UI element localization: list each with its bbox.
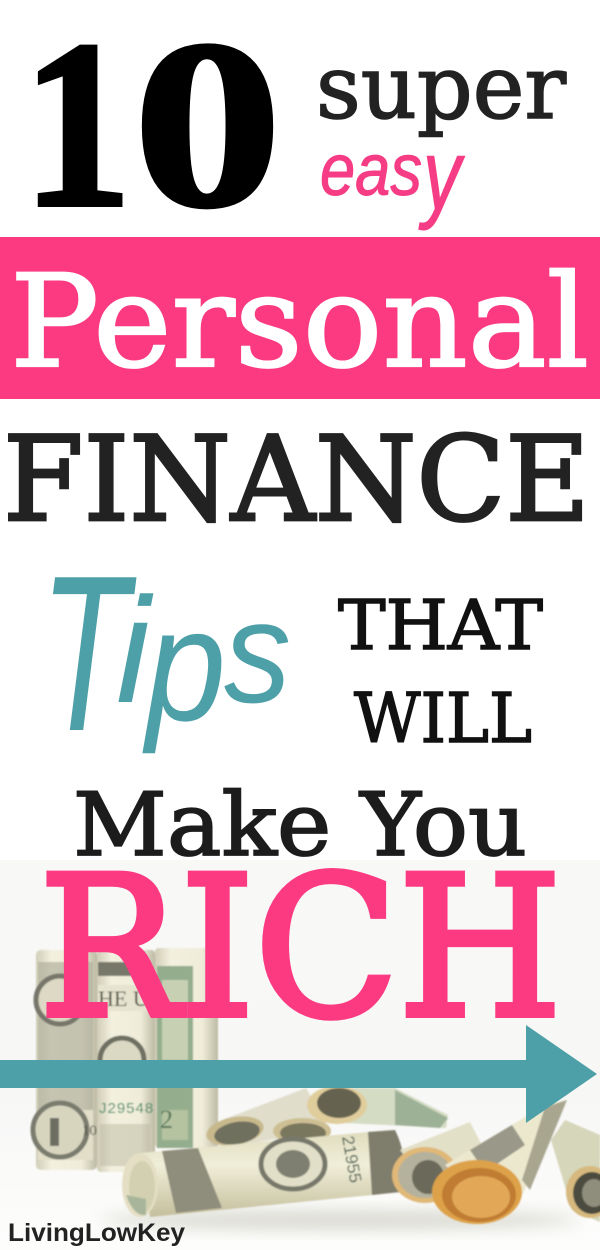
heading: Tips — [40, 530, 291, 778]
heading: Tips: T — [40, 530, 137, 778]
heading: WILL: WILL — [354, 680, 532, 759]
upright roll 2: J29548 — [99, 1100, 154, 1117]
heading: Tips: p — [142, 575, 226, 754]
heading: easy: eas — [320, 130, 422, 211]
heading: THAT: THAT — [338, 587, 543, 666]
heading: Make You: Make You — [73, 774, 527, 876]
upright roll 2 — [82, 950, 155, 1172]
far right rolled bill — [551, 1120, 600, 1222]
photo: rolled dollar bills — [0, 860, 600, 1250]
heading: 10 — [22, 0, 282, 257]
heading: easy — [320, 119, 466, 231]
right rolled bill orange — [432, 1100, 567, 1224]
heading: easy: y — [418, 119, 466, 231]
banner text: Personal: Personal — [10, 248, 589, 397]
heading: super: super — [316, 36, 567, 139]
arrow — [0, 1025, 597, 1123]
back rolled bill left — [204, 1088, 331, 1150]
upright roll 1 — [33, 950, 97, 1170]
heading: Tips: i — [116, 566, 154, 734]
right rolled bill dark — [392, 1122, 500, 1203]
pink banner — [0, 237, 600, 399]
upright roll 3 — [155, 948, 218, 1148]
front rolled bill: 21955 — [338, 1134, 365, 1184]
back rolled bill top — [307, 1086, 448, 1128]
heading: RICH: RICH — [39, 835, 562, 1061]
front rolled bill — [122, 1130, 405, 1217]
credit: LivingLowKey: LivingLowKey — [8, 1219, 185, 1247]
upright roll 3: 2 — [160, 1105, 173, 1134]
upright roll 2: 10 — [82, 1123, 97, 1139]
heading: Tips: s — [224, 571, 291, 733]
heading: FINANCE: FINANCE — [3, 411, 590, 548]
upright roll 2: HE U — [98, 986, 149, 1011]
